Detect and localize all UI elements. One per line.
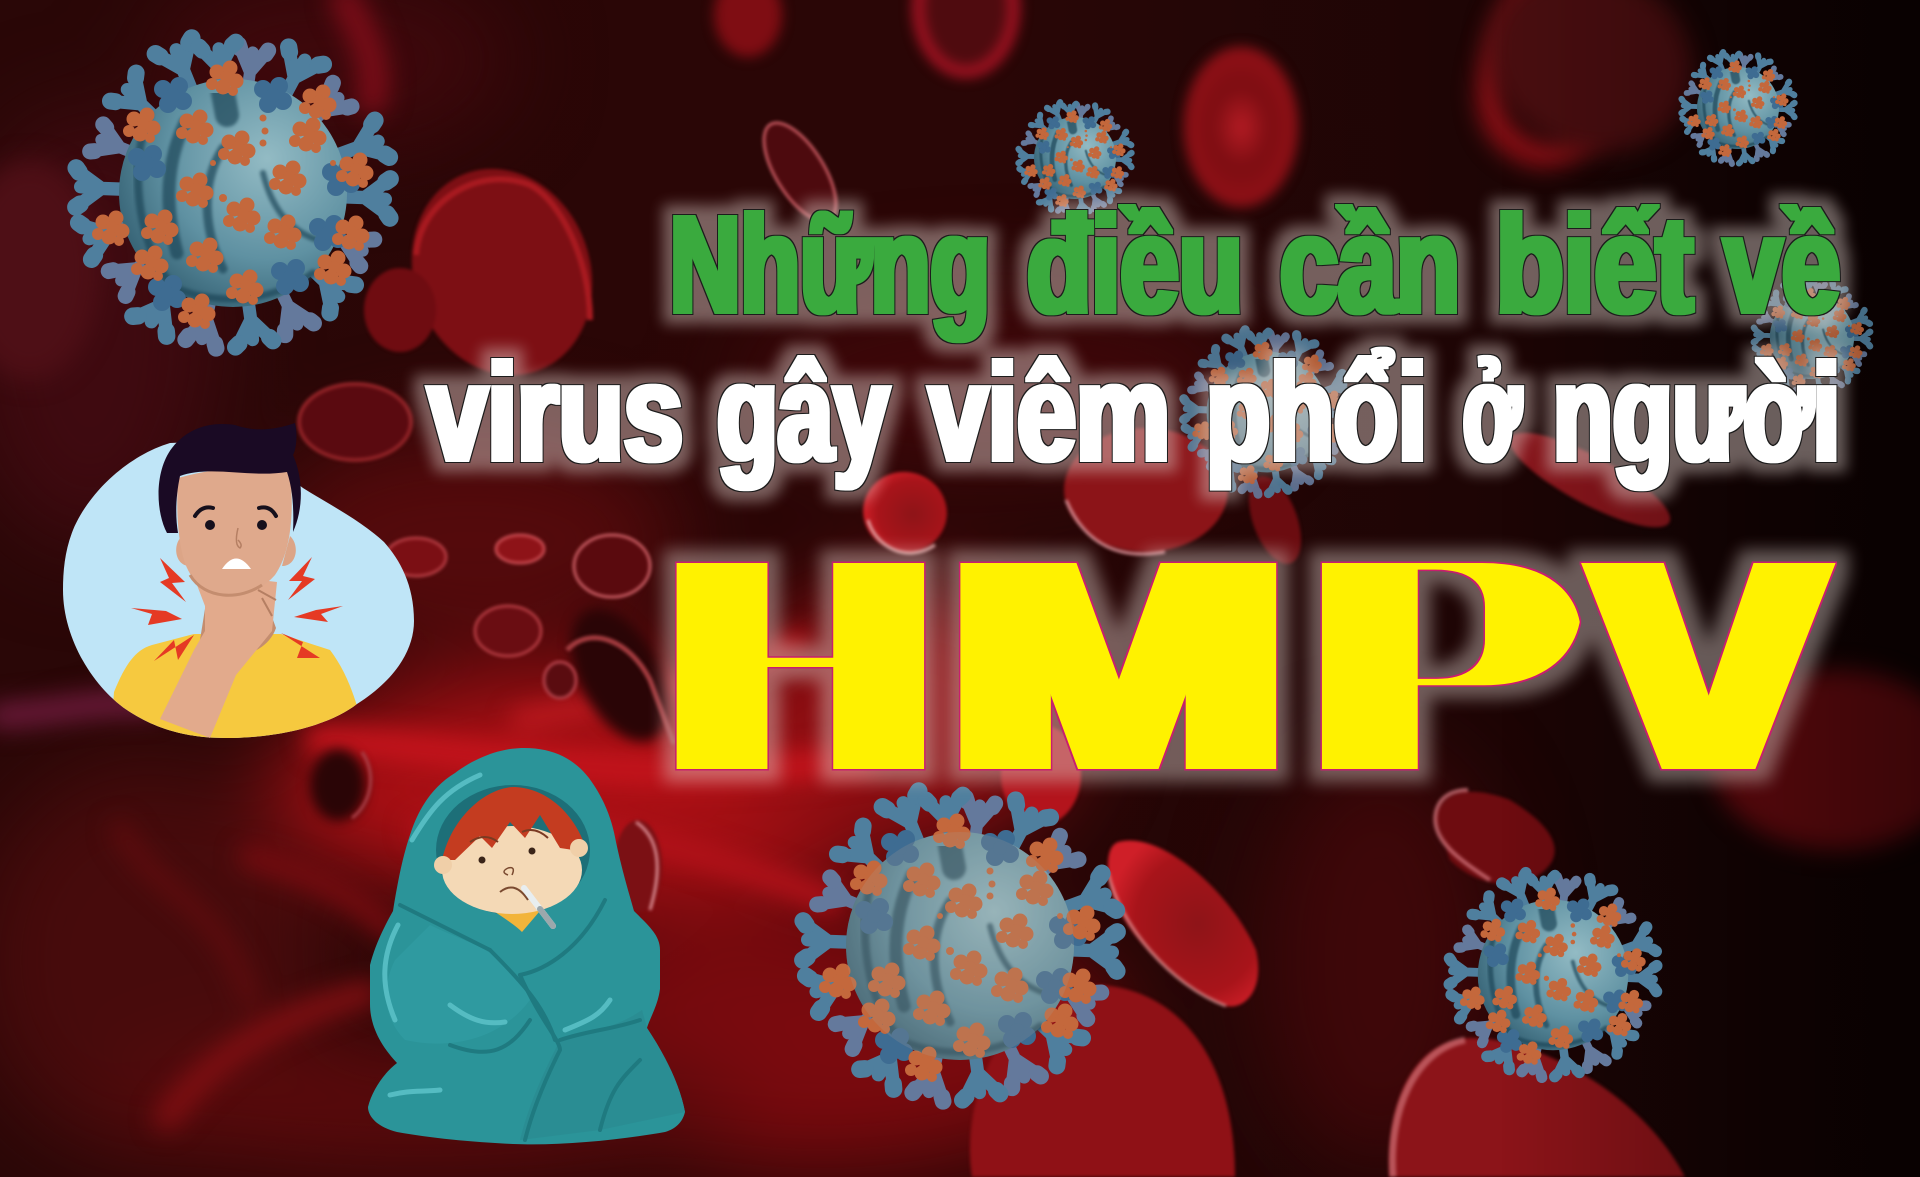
- virus: right of title: [1753, 280, 1871, 394]
- title: HMPV: P: [1316, 471, 1574, 858]
- title line 1: điều: [1027, 188, 1243, 342]
- title line 2: viêm: [929, 336, 1170, 490]
- title line 1: Những: [670, 188, 990, 342]
- virus: bottom centre: [802, 791, 1118, 1101]
- title line 2: virus: [428, 336, 683, 490]
- title line 2: [428, 336, 1840, 490]
- virus: top left: [75, 38, 391, 348]
- virus: top centre: [1018, 102, 1132, 214]
- title line 2: phổi: [1206, 336, 1427, 490]
- title line 1: về: [1724, 188, 1840, 342]
- title line 1: biết: [1496, 188, 1693, 342]
- virus: bottom right: [1449, 873, 1657, 1077]
- title line 2: ở: [1463, 336, 1522, 490]
- illustration: sick child wrapped in blanket with thermometer: [368, 748, 685, 1144]
- virus: top right: [1681, 52, 1795, 164]
- title: HMPV: V: [1586, 472, 1832, 859]
- illustration: man with sore throat: [63, 423, 414, 745]
- title: HMPV: H: [673, 473, 928, 859]
- title line 1: [670, 188, 1840, 342]
- title: HMPV: [673, 471, 1832, 859]
- title: HMPV: M: [954, 472, 1283, 859]
- title line 2: gây: [717, 336, 889, 490]
- title line 1: cần: [1280, 188, 1460, 342]
- virus: behind title: [1183, 330, 1351, 494]
